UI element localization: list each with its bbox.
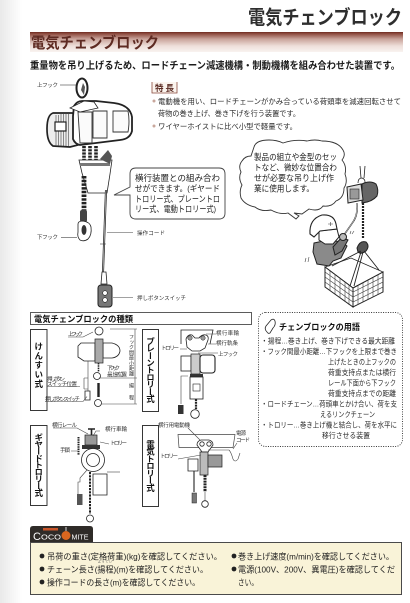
hoist in use [360, 166, 365, 178]
type: suspended: フック間最小距離 [128, 334, 134, 377]
callout: trolley combination: トロリー式、プレーントロ [135, 193, 220, 204]
upper hook label [37, 81, 76, 89]
cloud callout: usage: 製品の組立や金型のセッ [254, 151, 337, 162]
type: plain trolley [142, 329, 239, 418]
type: plain trolley: トロリー [161, 346, 179, 352]
label: けんすい式: けんすい式 [34, 342, 44, 389]
checklist right column: 電源(100V、200V、異電圧)を確認してくだ [238, 564, 395, 574]
lower hook label [37, 234, 77, 241]
upper hook label: 上フック [37, 81, 58, 89]
type: electric trolley: トロリー [160, 454, 178, 460]
type: suspended: 程 [128, 394, 134, 402]
glossary terms: 移行させる装置 [322, 430, 370, 440]
glossary terms: 荷重支持点までの距離 [328, 388, 396, 398]
upper hook [76, 78, 88, 98]
diagram: suspended [95, 327, 103, 335]
features heading [152, 82, 177, 93]
checklist left column: チェーン長さ(揚程)(m)を確認してください。 [47, 564, 208, 574]
labels: plain trolley: 横行車輪 [216, 329, 239, 337]
checklist right column: さい。 [238, 578, 258, 588]
label: プレーントロリー式: プレーントロリー式 [146, 337, 156, 404]
chain [84, 146, 96, 172]
type: electric trolley: 電源 [236, 429, 246, 437]
type: electric trolley: コード [236, 437, 250, 444]
checklist right column: 巻き上げ速度(m/min)を確認してください。 [238, 550, 394, 562]
labels: suspended: 上フック [68, 330, 83, 338]
glossary terms: 上げたときの上フックの [328, 358, 396, 366]
label: 電気トロリー式: 電気トロリー式 [146, 440, 156, 493]
panel: COCOMITE checklist [30, 526, 402, 594]
label: ギヤードトロリー式: ギヤードトロリー式 [34, 433, 44, 498]
type: geared trolley: 横行車輪 [105, 425, 127, 433]
lower hook label: 下フック [37, 234, 58, 241]
glossary terms: 荷重支持点または横行 [328, 367, 396, 377]
labels: geared trolley: 横行レール [52, 421, 77, 429]
type: plain trolley: 横行軌条 [216, 339, 238, 347]
type: suspended: 下フック [107, 365, 120, 372]
lower chain [82, 176, 86, 212]
type: suspended [30, 327, 137, 410]
icon: chain link [265, 319, 275, 333]
checklist left column [40, 550, 222, 588]
callout: trolley combination: リー式、電動トロリー式) [135, 203, 216, 214]
COCOMITE logo tab: MITE [72, 534, 89, 542]
checklist left column: 操作コードの長さ(m)を確認してください。 [47, 576, 200, 588]
type: plain trolley: 上フック [218, 350, 238, 358]
type: geared trolley [30, 421, 127, 522]
cloud callout: usage: せが必要な吊り上げ作 [254, 172, 334, 183]
glossary terms: ・揚程…巻き上げ、巻き下げできる最大距離 [261, 336, 395, 346]
cloud callout: usage: 業に使用します。 [254, 182, 314, 194]
types heading [30, 312, 252, 324]
cord label: 操作コード [137, 229, 165, 237]
chain bag [79, 160, 112, 193]
glossary terms [261, 336, 397, 440]
lower hook [78, 221, 91, 241]
worker [313, 240, 347, 266]
type: suspended: 揚 [128, 382, 134, 390]
type: suspended: 押しボタンスイッチ [45, 395, 80, 403]
callout: trolley combination: せができます。(ギヤード [135, 182, 220, 194]
diagram: plain trolley [181, 330, 213, 344]
operation cord [103, 190, 106, 272]
load [325, 258, 383, 288]
glossary heading: チェンブロックの用語 [279, 322, 360, 332]
diagram: geared trolley [88, 429, 95, 436]
features heading: 特長 [155, 83, 174, 93]
features: 荷物の巻き上げ、巻き下げを行う装置です。 [158, 108, 300, 118]
callout: trolley combination [114, 168, 225, 219]
illustration: worker lifting load [305, 166, 383, 307]
type: geared trolley: 手鎖 [60, 446, 70, 454]
type: suspended: スイッチ位置 [47, 380, 77, 388]
features: 電動機を用い、ロードチェーンがかみ合っている荷頭車を減速回転させて [158, 96, 401, 106]
switch label [113, 294, 186, 302]
glossary terms: レール下面から下フック [328, 378, 396, 388]
hoist motor [47, 113, 78, 147]
diagram: electric trolley [178, 434, 235, 448]
type: suspended: 押しボタン [47, 375, 65, 383]
section header band: 電気チェンブロック [31, 33, 159, 52]
checklist left column: 吊荷の重さ(定格荷重)(kg)を確認してください。 [47, 550, 222, 562]
hoist housing [73, 101, 132, 145]
checklist left column: ようてい [98, 558, 112, 564]
panel: types of electric chain block [30, 312, 252, 522]
COCOMITE logo tab [30, 526, 93, 543]
features [152, 82, 401, 131]
section header band [30, 32, 403, 52]
cord label [107, 229, 165, 237]
pendant switch [101, 272, 107, 284]
type: suspended: 最上部位置 [107, 370, 127, 378]
cloud callout: usage [240, 140, 346, 219]
checklist box [30, 542, 402, 594]
glossary terms: えるリンクチェーン [320, 410, 375, 419]
types heading: 電気チェンブロックの種類 [34, 314, 133, 324]
type: geared trolley: トロリー [110, 441, 127, 447]
checklist right column [232, 550, 395, 588]
callout: trolley combination: 横行装置との組み合わ [135, 172, 220, 183]
COCOMITE logo tab: C [33, 531, 41, 543]
labels: electric trolley: 横行用電動機 [158, 421, 190, 429]
cloud callout: usage: トなど、微妙な位置合わ [254, 162, 337, 172]
lower hook block [80, 210, 87, 222]
feature bullets [152, 100, 156, 102]
COCOMITE logo tab: OCO [41, 532, 61, 542]
illustration: electric chain block [37, 78, 186, 307]
type: electric trolley [142, 421, 250, 507]
switch label: 押しボタンスイッチ [137, 294, 186, 302]
panel: glossary [258, 312, 402, 446]
features: ワイヤーホイストに比べ小型で軽量です。 [158, 121, 297, 131]
